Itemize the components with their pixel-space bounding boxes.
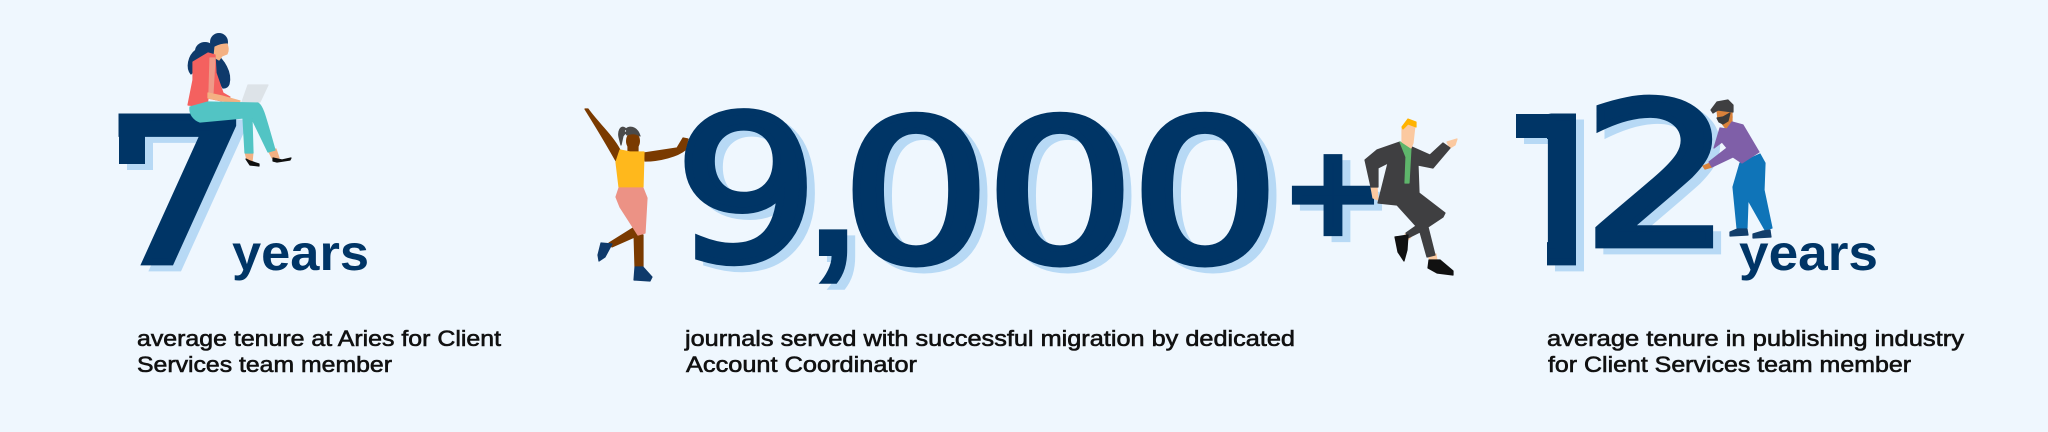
caption: tenure at Aries: average tenure at Aries for Client [137,326,501,351]
caption: journals served: journals served with successful migration by dedicated [684,326,1295,351]
big number 9,000+: 0 [841,79,991,308]
big number 9,000+: 9 [674,74,819,308]
icon: man pushing number [1703,100,1772,238]
big number 12: 1 [1487,78,1631,310]
icon: man in suit [1365,119,1457,275]
caption: journals served: Account Coordinator [686,352,917,377]
big number 9,000+: , [805,95,861,295]
unit: years: years [1739,225,1878,281]
caption: tenure at Aries: Services team member [137,352,392,377]
icon: woman sitting with laptop [188,33,291,166]
unit: years: years [232,225,369,281]
big number 9,000+: 0 [1130,79,1280,308]
big number 12 [1516,94,1722,272]
big number 9,000+: + [1284,124,1382,259]
icon: dancing woman [585,109,688,281]
big number 9,000+ [674,74,1382,308]
stat: 9,000+ journals [674,74,1382,377]
big number 12: 2 [1582,61,1733,292]
big number 7: 7 [103,78,252,310]
stat: 7 years [103,78,501,377]
big number 9,000+: 0 [985,79,1135,308]
stat: 12 years [1516,94,1964,372]
caption: tenure in publishing: for Client Services team member [1548,352,1911,377]
caption: tenure in publishing: average tenure in publishing industry [1547,326,1964,351]
